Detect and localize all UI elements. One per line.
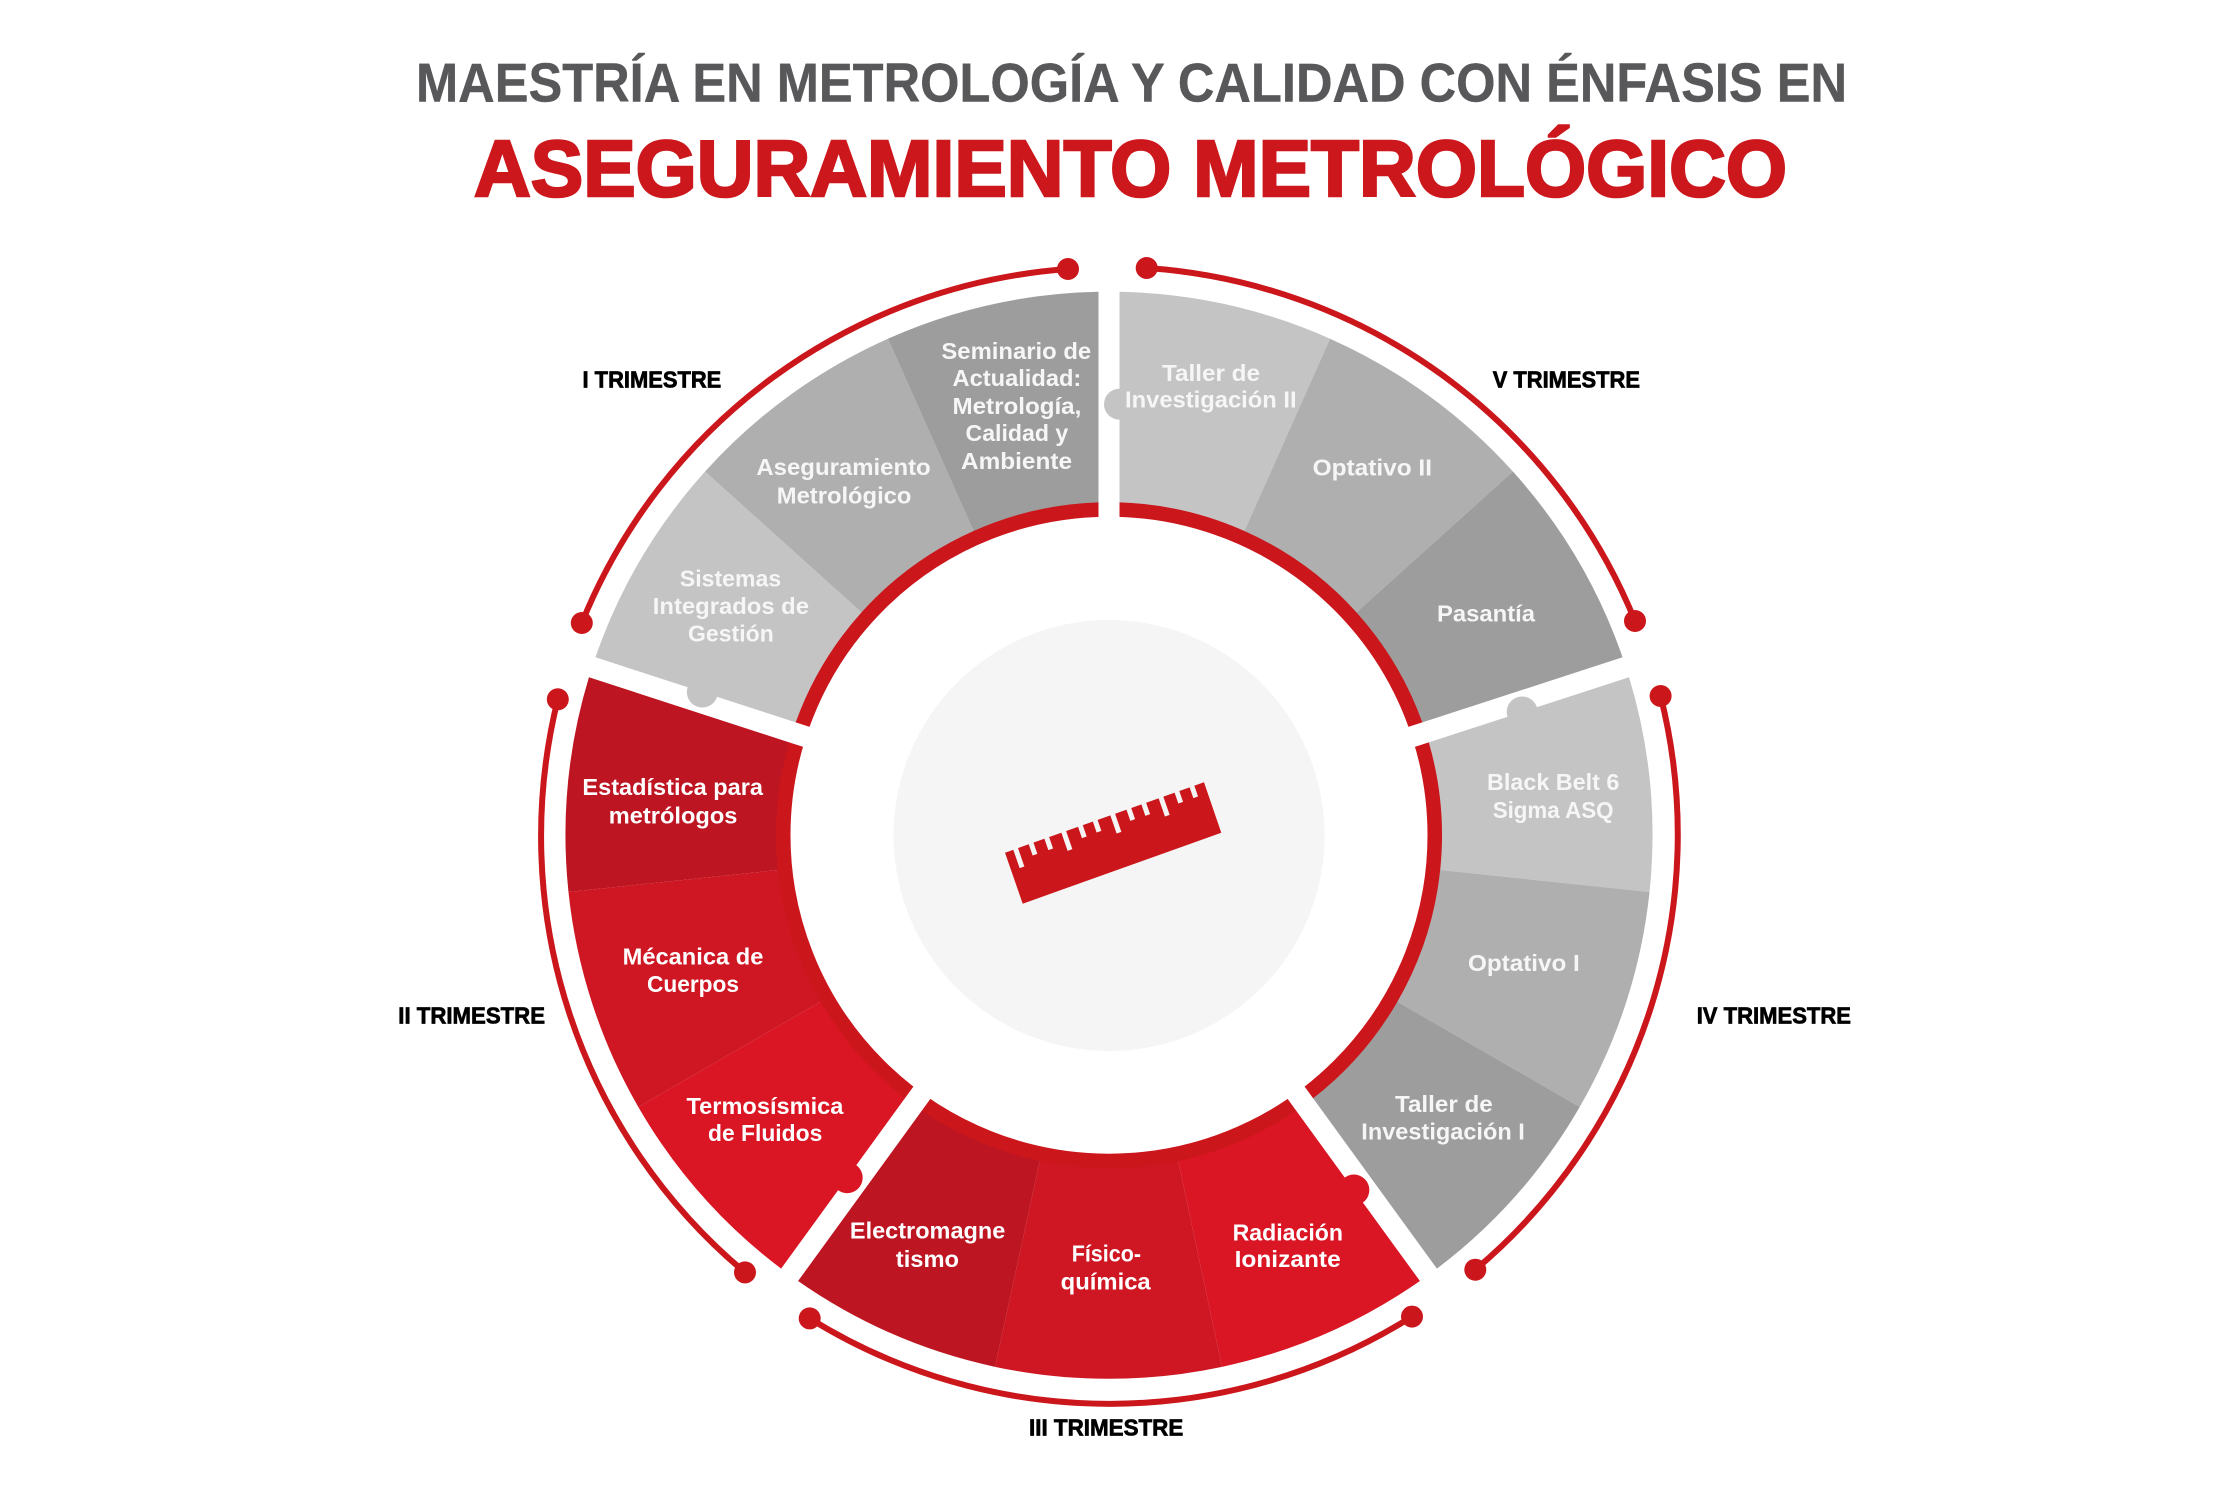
segment: Aseguramiento Metrológico bbox=[705, 339, 974, 612]
segment: Sistemas Integrados de Gestión: Integrados de bbox=[653, 593, 809, 619]
segment: Taller de Investigación II bbox=[1104, 292, 1330, 531]
segment: Mécanica de Cuerpos bbox=[568, 870, 821, 1107]
panel: II trimestre bbox=[566, 677, 905, 1269]
segment: Taller de Investigación I: Taller de bbox=[1395, 1091, 1493, 1117]
segment: Black Belt 6 Sigma ASQ: Black Belt 6 bbox=[1487, 769, 1619, 795]
segment: Sistemas Integrados de Gestión bbox=[595, 472, 862, 722]
title line 1: MAESTRÍA EN METROLOGÍA Y CALIDAD CON ÉNFASIS EN bbox=[416, 53, 1847, 114]
segment: Seminario de Actualidad: Ambiente bbox=[961, 448, 1072, 474]
segment: Termosísmica de Fluidos: de Fluidos bbox=[708, 1120, 822, 1146]
segment: Pasantía: Pasantía bbox=[1437, 601, 1535, 627]
panel: V trimestre bbox=[1104, 292, 1623, 722]
segment: Electromagnetismo bbox=[798, 1111, 1040, 1367]
segment: Termosísmica de Fluidos: Termosísmica bbox=[686, 1093, 844, 1119]
segment: Taller de Investigación II: Taller de bbox=[1162, 360, 1260, 386]
segment: Físico-química: química bbox=[1061, 1268, 1151, 1294]
label: V trimestre: V TRIMESTRE bbox=[1493, 367, 1640, 393]
segment: Electromagnetismo: tismo bbox=[896, 1246, 959, 1272]
segment: Aseguramiento Metrológico: Aseguramiento bbox=[756, 454, 931, 480]
segment: Seminario de Actualidad: Actualidad: bbox=[952, 365, 1081, 391]
segment: Seminario de Actualidad: Metrología, bbox=[952, 393, 1081, 419]
arc: III trimestre bbox=[799, 1306, 1423, 1404]
arc: I trimestre bbox=[571, 258, 1079, 634]
segment: Optativo I bbox=[1397, 870, 1650, 1107]
segment: Aseguramiento Metrológico: Metrológico bbox=[777, 482, 911, 508]
segment: Seminario de Actualidad: Seminario de bbox=[941, 338, 1091, 364]
segment: Sistemas Integrados de Gestión: Gestión bbox=[688, 621, 774, 647]
panel: IV trimestre bbox=[1313, 677, 1652, 1269]
panel: III trimestre bbox=[798, 1111, 1420, 1379]
segment: Taller de Investigación II: Investigación II bbox=[1125, 387, 1297, 413]
segment: Electromagnetismo: Electromagne bbox=[850, 1217, 1005, 1243]
segment: Taller de Investigación I bbox=[1313, 1002, 1580, 1269]
inner red ring bbox=[778, 490, 1440, 1161]
segment: Seminario de Actualidad bbox=[888, 292, 1098, 531]
segment: Termosísmica de Fluidos bbox=[638, 1002, 905, 1269]
segment: Optativo II: Optativo II bbox=[1313, 455, 1432, 481]
icon: ruler bbox=[1005, 782, 1221, 904]
central disc bbox=[894, 620, 1324, 1051]
label: III trimestre: III TRIMESTRE bbox=[1029, 1415, 1183, 1441]
segment: Radiación Ionizante: Ionizante bbox=[1235, 1246, 1341, 1272]
label: IV trimestre: IV TRIMESTRE bbox=[1697, 1002, 1851, 1028]
segment: Radiación Ionizante bbox=[1178, 1111, 1420, 1367]
arc: V trimestre bbox=[1136, 257, 1646, 632]
segment: Mécanica de Cuerpos: Cuerpos bbox=[647, 971, 739, 997]
label: I trimestre: I TRIMESTRE bbox=[582, 367, 721, 393]
segment: Radiación Ionizante: Radiación bbox=[1233, 1220, 1343, 1246]
segment: Optativo I: Optativo I bbox=[1468, 950, 1580, 976]
segment: Estadística para metrólogos bbox=[566, 677, 789, 892]
title bbox=[416, 53, 1847, 213]
segment: Black Belt 6 Sigma ASQ: Sigma ASQ bbox=[1493, 797, 1614, 823]
segment: Físico-química bbox=[995, 1161, 1222, 1379]
segment: Black Belt 6 Sigma ASQ bbox=[1429, 677, 1652, 892]
panel: I trimestre bbox=[595, 292, 1098, 722]
arc: IV trimestre bbox=[1464, 685, 1678, 1281]
label: II trimestre: II TRIMESTRE bbox=[398, 1002, 545, 1028]
segment: Sistemas Integrados de Gestión: Sistemas bbox=[680, 566, 781, 592]
segment: Mécanica de Cuerpos: Mécanica de bbox=[623, 943, 763, 969]
segment: Optativo II bbox=[1244, 339, 1513, 612]
arc: II trimestre bbox=[541, 688, 756, 1283]
segment: Físico-química: Físico- bbox=[1072, 1241, 1141, 1267]
segment: Estadística para metrólogos: metrólogos bbox=[609, 803, 737, 829]
segment: Seminario de Actualidad: Calidad y bbox=[966, 420, 1068, 446]
title line 2: ASEGURAMIENTO METROLÓGICO bbox=[474, 124, 1787, 213]
segment: Estadística para metrólogos: Estadística para bbox=[582, 774, 763, 800]
segment: Taller de Investigación I: Investigación I bbox=[1361, 1118, 1525, 1144]
segment: Pasantía bbox=[1356, 472, 1623, 722]
